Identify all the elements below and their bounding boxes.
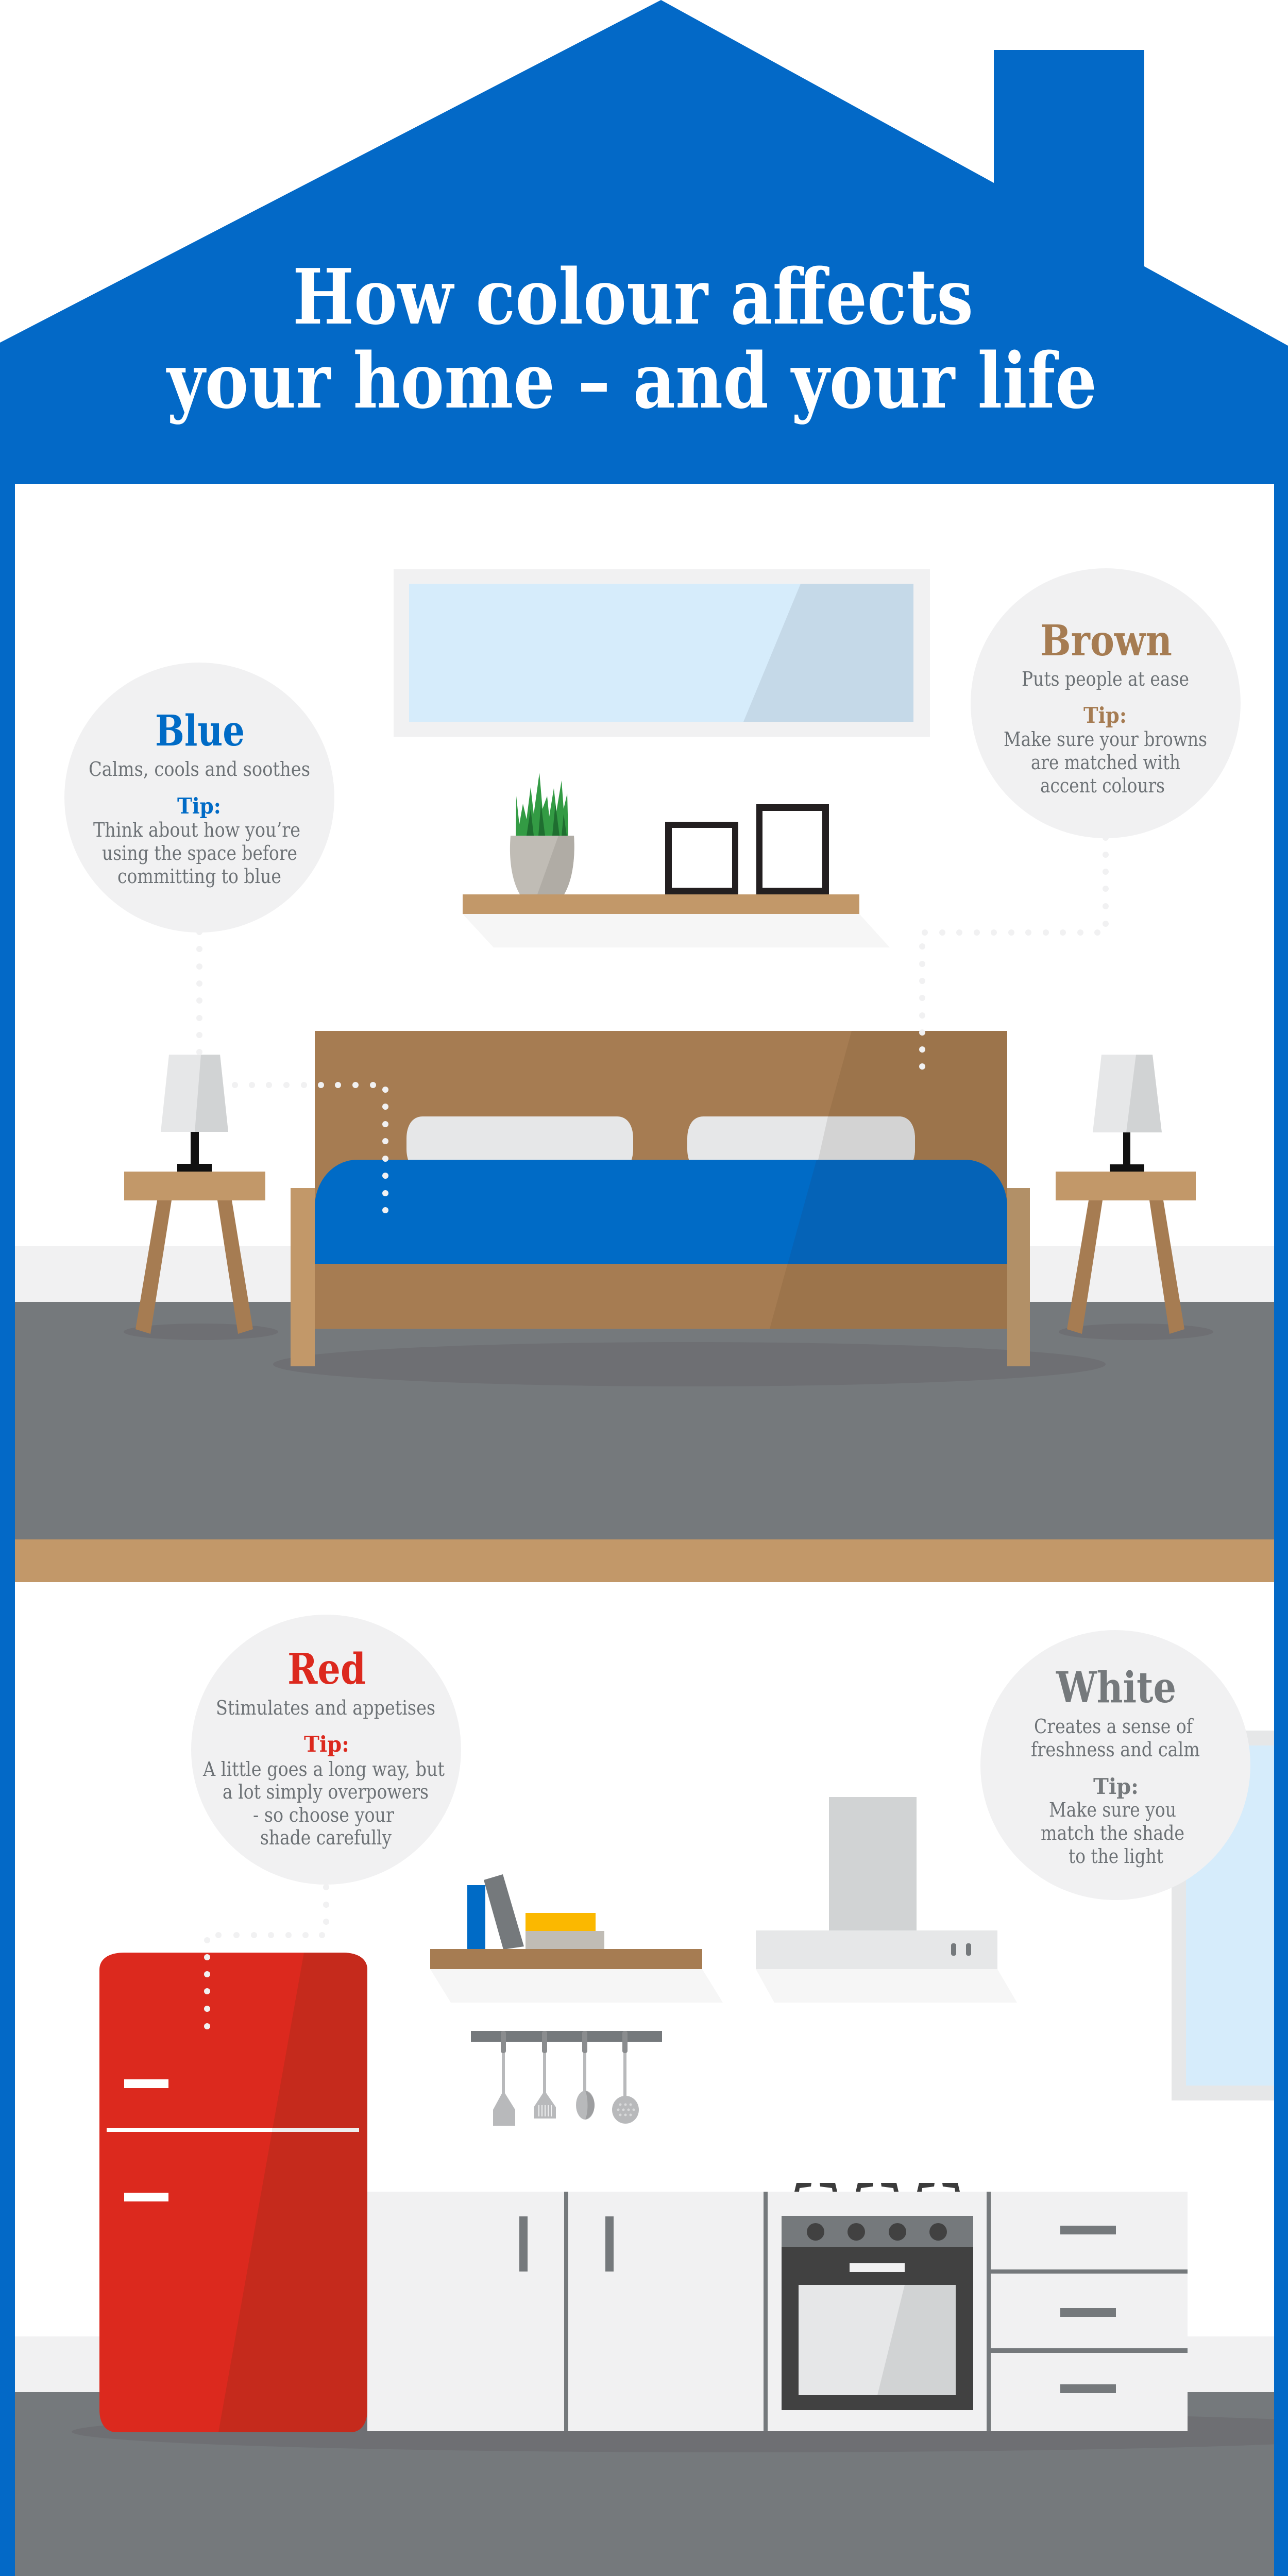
icon: potted grass [510,773,574,894]
callout: white: Make sure you [1049,1799,1176,1821]
callout: red: Tip: [304,1732,349,1757]
extractor hood [756,1797,1017,2003]
callout: white: match the shade [1041,1822,1184,1844]
kitchen shelf with books and boxes [430,1874,723,2003]
bed [273,1031,1106,1386]
kitchen floor shadow [72,2411,1274,2452]
bedroom floor [15,1302,1274,1539]
callout: brown: Tip: [1083,703,1127,728]
callout: brown: Make sure your browns [1004,728,1207,751]
callout: blue: using the space before [102,842,297,865]
callout: blue: Tip: [177,793,221,819]
callout: blue: committing to blue [117,865,281,888]
callout: white: Tip: [1093,1774,1139,1799]
wall shelf with plant and frames [463,773,890,947]
utensil rail [471,2031,662,2126]
blue blanket [315,1160,1007,1264]
icon: small picture frame [665,822,738,894]
callout: red: - so choose your [253,1804,395,1826]
kitchen wall skirting [15,2336,1274,2392]
callout: white: Creates a sense of [1034,1715,1194,1738]
callout: red: Red [287,1645,366,1694]
callout: blue: Blue [155,706,245,756]
title: your home – and your life [166,336,1097,426]
panel: kitchen scene [15,1615,1274,2576]
callout: blue: Think about how you’re [93,819,300,841]
icon: tall picture frame [756,804,829,894]
dotted connector: blue [196,929,388,1213]
right pillow [687,1116,915,1167]
callout: red: a lot simply overpowers [223,1781,429,1803]
right bedside table and lamp [1056,1055,1213,1340]
callout: blue: Calms, cools and soothes [89,758,310,781]
callout: brown: Brown [1040,616,1172,666]
callout: brown [971,568,1241,838]
kitchen cabinets [367,2192,1188,2431]
callout: red: Stimulates and appetises [216,1697,435,1719]
callout: red [191,1615,461,1885]
dotted connector: red [204,1884,329,2029]
title: How colour affects [293,252,973,342]
house interior [15,484,1274,2576]
callout: red: A little goes a long way, but [202,1758,445,1781]
dotted connector: brown [919,835,1109,1070]
bedroom wooden floor band [15,1539,1274,1582]
callout: red: shade carefully [260,1826,392,1849]
callout: white: White [1056,1663,1176,1713]
title [166,252,1097,426]
red fridge [99,1953,367,2432]
bed posts [291,1188,315,1366]
bedroom window [394,569,930,737]
callout: white: to the light [1069,1845,1163,1868]
left bedside table and lamp [124,1055,278,1340]
kitchen window [1172,1731,1274,2100]
left pillow [406,1116,633,1167]
callout: brown: are matched with [1031,751,1180,774]
oven and hob [782,2183,973,2410]
callout: white: freshness and calm [1031,1738,1200,1761]
callout: white [980,1630,1250,1900]
panel: bedroom scene [15,568,1274,1582]
callout: brown: accent colours [1040,774,1165,797]
kitchen floor [15,2392,1274,2576]
callout: blue [64,663,334,933]
callout: brown: Puts people at ease [1022,668,1189,690]
bedroom wall skirting [15,1246,1274,1302]
